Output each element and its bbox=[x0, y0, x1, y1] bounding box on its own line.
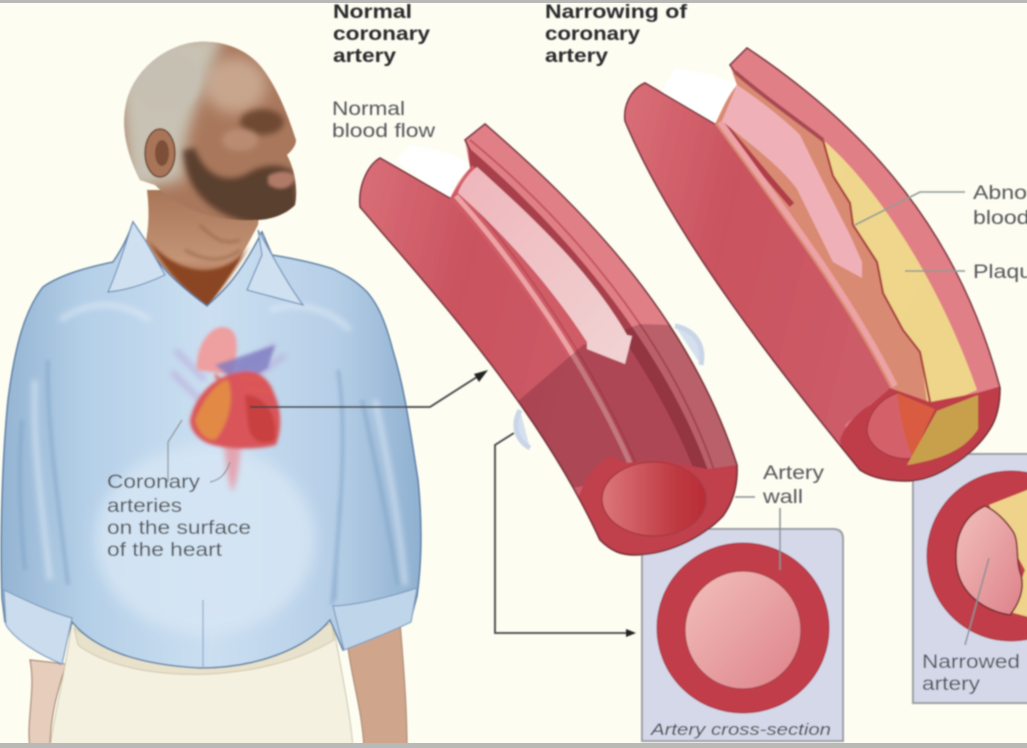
interior band 2 bbox=[715, 72, 935, 410]
shirt bbox=[1, 222, 421, 668]
label: artery wall: Artery bbox=[763, 463, 825, 484]
left cuff bbox=[4, 590, 72, 664]
label: normal blood flow: blood flow bbox=[332, 121, 435, 142]
ring bbox=[927, 471, 1027, 641]
label: abnormal blood flow bbox=[855, 183, 1027, 229]
label: narrowed artery: artery bbox=[922, 674, 981, 695]
label: coronary arteries: of the heart bbox=[107, 540, 223, 561]
flow arrow bbox=[458, 167, 632, 364]
pale stripe 2 bbox=[720, 122, 895, 386]
beard bbox=[183, 148, 298, 224]
end ring 2 bbox=[840, 386, 1000, 482]
label: artery wall bbox=[735, 463, 825, 570]
collar bbox=[108, 222, 303, 305]
title: normal coronary artery: artery bbox=[333, 46, 397, 67]
dark band top bbox=[735, 72, 823, 140]
label: narrowed artery bbox=[922, 652, 1020, 695]
artery ring bbox=[657, 543, 829, 713]
right cuff bbox=[333, 588, 417, 650]
belt band bbox=[74, 622, 334, 674]
white cut lining bbox=[395, 145, 470, 198]
artery: narrowed coronary bbox=[610, 40, 1020, 490]
torso light bbox=[95, 445, 315, 635]
sleeve and torso folds bbox=[20, 360, 398, 605]
jagged plaque edge bbox=[823, 140, 930, 402]
label: normal blood flow bbox=[332, 99, 435, 142]
plaque bbox=[989, 485, 1027, 620]
frame: bottom border bbox=[0, 743, 1027, 748]
forehead light bbox=[203, 57, 267, 113]
title: narrowing of coronary artery: coronary bbox=[545, 24, 640, 45]
artery outline 2 bbox=[625, 48, 1000, 481]
lips bbox=[268, 171, 296, 189]
narrowed lumen bbox=[956, 506, 1022, 615]
head bbox=[123, 40, 298, 221]
label: coronary arteries: Coronary bbox=[107, 472, 201, 493]
title: narrowing of coronary artery bbox=[545, 2, 688, 67]
eye socket bbox=[240, 109, 284, 135]
back wall 2 bbox=[730, 48, 1000, 428]
back wall dark stripe bbox=[468, 147, 708, 470]
arm right bbox=[348, 622, 407, 748]
lumen bbox=[685, 571, 801, 689]
label: coronary arteries bbox=[107, 472, 251, 561]
title: narrowing of coronary artery: Narrowing of bbox=[545, 2, 688, 23]
plaque section bbox=[907, 395, 978, 465]
title: narrowing of coronary artery: artery bbox=[545, 46, 609, 67]
lumen 2 bbox=[867, 393, 935, 459]
hair bbox=[115, 35, 225, 190]
trousers bbox=[50, 618, 353, 748]
back wall outer highlight bbox=[450, 124, 737, 470]
heart bbox=[172, 327, 285, 492]
title: normal coronary artery: coronary bbox=[333, 24, 431, 45]
panel: narrowed cross-section bbox=[913, 454, 1027, 703]
arm left bbox=[29, 660, 66, 748]
frame: top border bbox=[0, 0, 1027, 3]
label: coronary arteries: arteries bbox=[107, 496, 182, 517]
label: normal blood flow: Normal bbox=[332, 99, 405, 120]
caption: Artery cross-section bbox=[650, 720, 831, 739]
figure: man with heart bbox=[1, 35, 421, 748]
artery: normal coronary bbox=[350, 110, 760, 570]
lumen bbox=[602, 462, 706, 536]
leader: coronary arteries bbox=[168, 420, 230, 482]
arrow: heart to artery bbox=[250, 370, 488, 407]
label: coronary arteries: on the surface bbox=[107, 518, 251, 539]
plaque body bbox=[823, 140, 977, 406]
arrow: artery to cross-section bbox=[495, 433, 636, 637]
white cut lining 2 bbox=[662, 68, 737, 124]
blue zoom circle edges bbox=[516, 326, 702, 448]
title: normal coronary artery bbox=[333, 2, 431, 67]
blood flow band bbox=[450, 165, 696, 475]
label: plaque bbox=[905, 262, 1027, 283]
front wall 2 bbox=[625, 83, 890, 470]
label: artery wall: wall bbox=[762, 487, 803, 508]
artery outline bbox=[360, 124, 737, 555]
panel: artery cross-section bbox=[642, 529, 843, 741]
flow arrow 2 bbox=[722, 85, 862, 278]
pale stripe bbox=[456, 196, 630, 463]
end ring bbox=[578, 456, 738, 556]
neck bbox=[145, 190, 262, 306]
front wall bbox=[360, 158, 620, 496]
title: normal coronary artery: Normal bbox=[333, 2, 412, 23]
shaded zoom lens bbox=[517, 324, 750, 490]
label: narrowed artery: Narrowed bbox=[922, 652, 1020, 673]
leader: narrowed artery bbox=[965, 558, 989, 645]
ear bbox=[145, 129, 175, 177]
